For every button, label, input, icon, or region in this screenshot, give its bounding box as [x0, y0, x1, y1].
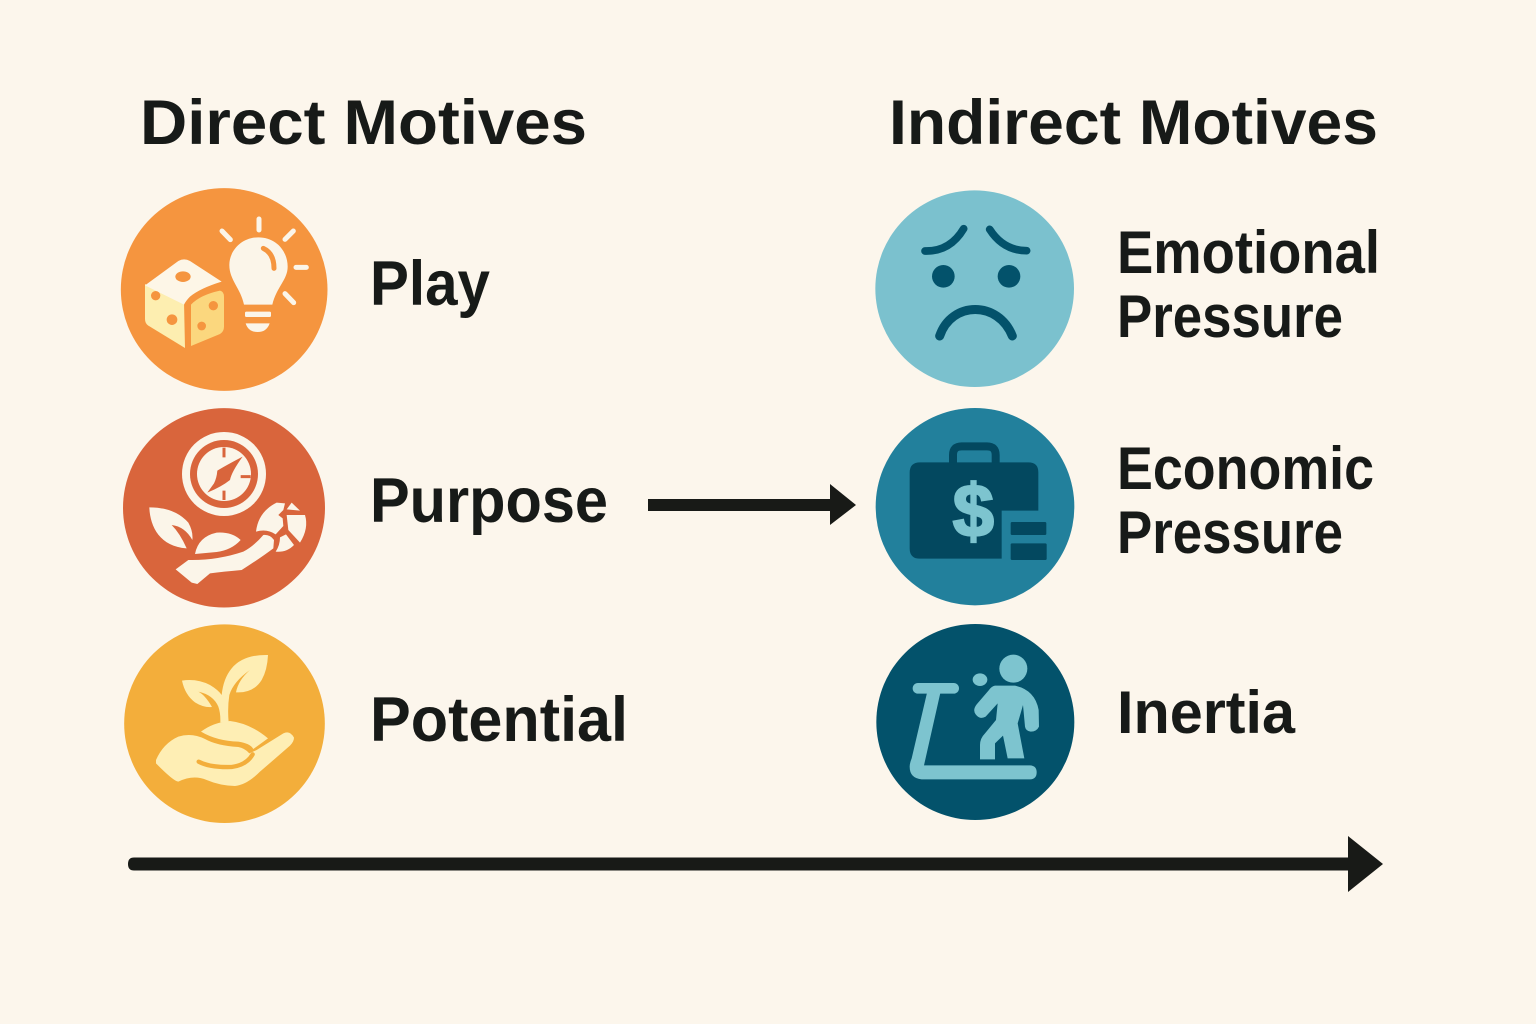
label: economic pressure: Economic [1117, 435, 1374, 502]
icon: worried face on light blue circle [875, 190, 1074, 387]
arrow: continuum from direct to indirect [128, 836, 1383, 892]
arrow: purpose to economic pressure [648, 484, 856, 525]
icon: hand holding sprout on yellow circle [124, 624, 325, 823]
panel: direct motives [121, 88, 628, 823]
heading: direct motives: Direct Motives [140, 88, 587, 158]
icon: briefcase with dollar on teal circle [876, 408, 1074, 605]
label: purpose: Purpose [370, 466, 608, 536]
label: play: Play [370, 249, 490, 319]
panel: indirect motives [875, 88, 1380, 820]
heading: indirect motives: Indirect Motives [889, 88, 1378, 158]
label: emotional pressure [1117, 219, 1380, 350]
icon: briefcase with dollar on teal circle: $ [953, 470, 994, 553]
icon: person on treadmill on dark blue circle [876, 624, 1074, 820]
icon: compass, leaf, hand and globe on red circle [123, 408, 325, 607]
label: economic pressure: Pressure [1117, 499, 1343, 566]
label: emotional pressure: Emotional [1117, 219, 1380, 286]
label: potential: Potential [370, 685, 628, 755]
label: inertia: Inertia [1117, 679, 1296, 746]
icon: dice and light bulb on orange circle [121, 188, 327, 391]
label: economic pressure [1117, 435, 1374, 566]
label: emotional pressure: Pressure [1117, 283, 1343, 350]
